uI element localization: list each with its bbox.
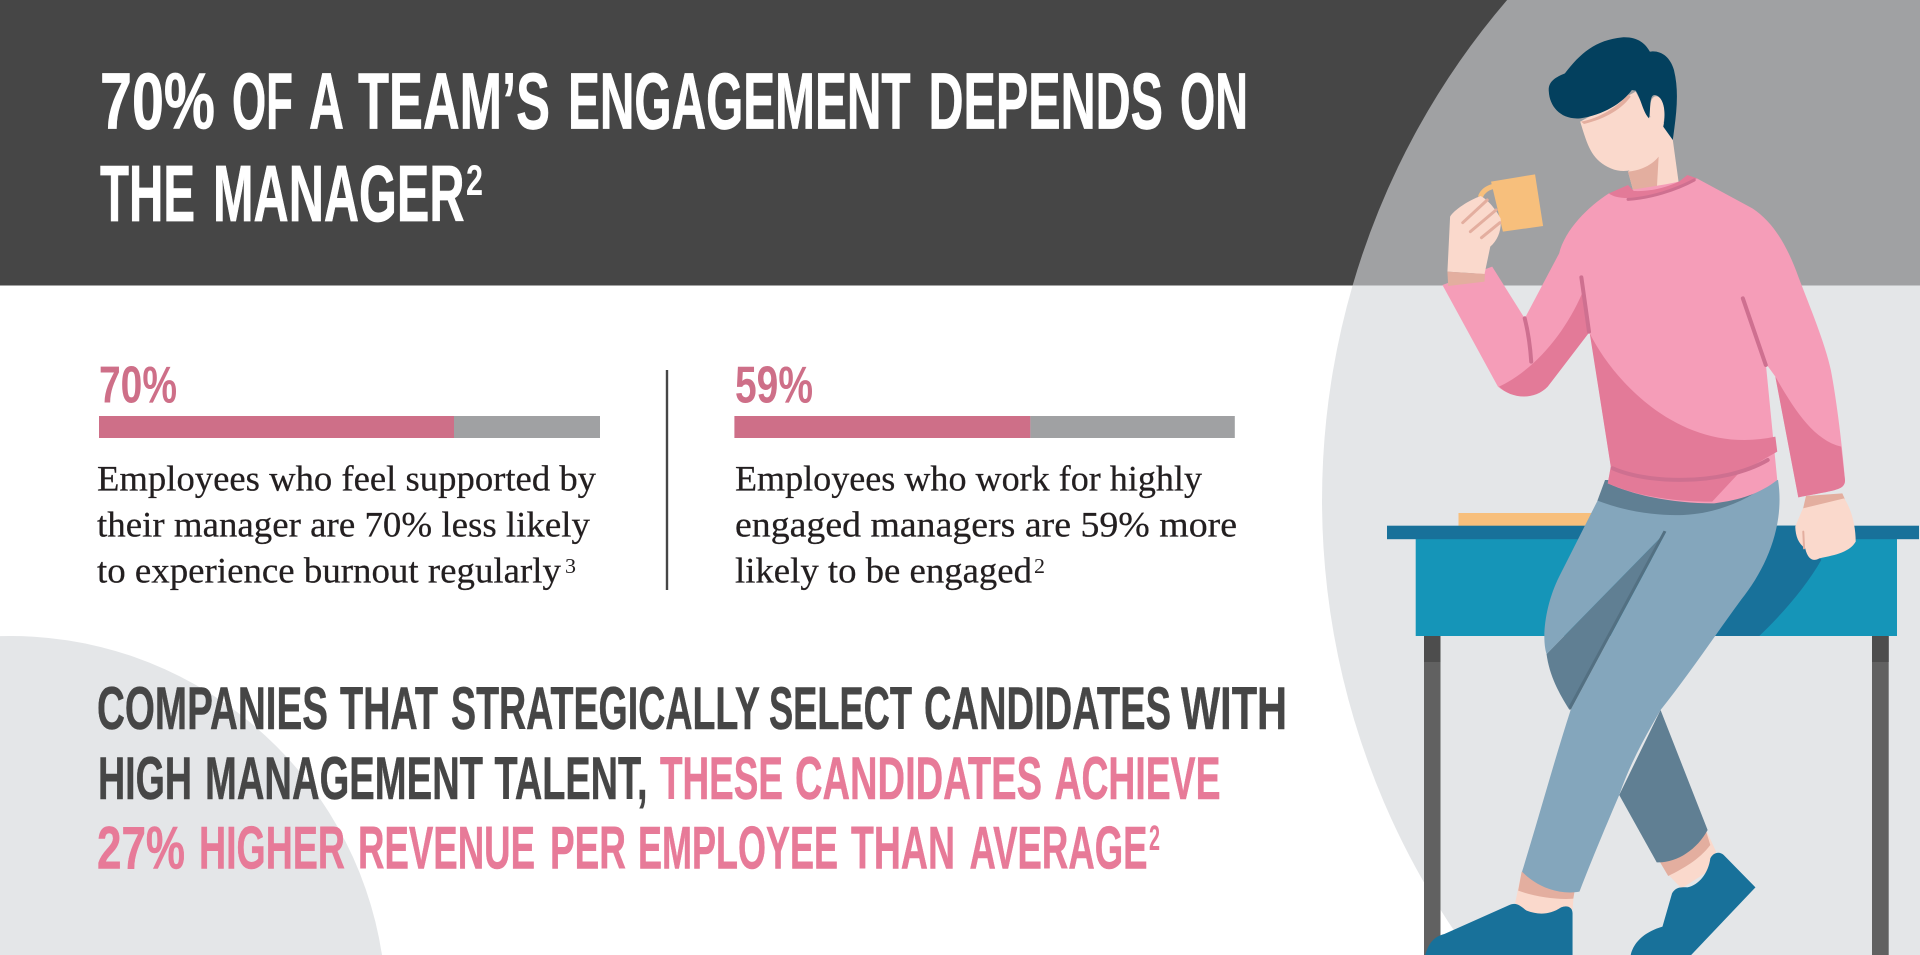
waistband: [1597, 480, 1773, 515]
callout text: THAN: [851, 814, 955, 882]
callout text: CANDIDATES: [924, 675, 1171, 742]
callout text: TALENT,: [494, 745, 648, 812]
stat value 70%: 70%: [99, 357, 177, 415]
sweater shading: body: [1590, 333, 1777, 502]
title: TEAM’S: [358, 56, 550, 146]
face: [1580, 92, 1673, 171]
description text: their manager are 70% less likely: [97, 505, 590, 545]
title: OF: [232, 56, 293, 146]
sweater shading: arm: [1499, 293, 1590, 397]
description text: Employees who work for highly: [735, 459, 1202, 499]
panel: 70% statistic: [97, 357, 600, 591]
callout text: SELECT: [769, 675, 912, 742]
finger lines: [1463, 200, 1500, 238]
description text: 2: [1034, 554, 1045, 578]
sweater fold lines: [1525, 180, 1768, 480]
background circle: right, upper grey part: [1353, 0, 1920, 286]
panel: 59% statistic: [734, 357, 1237, 591]
illustration: desk: [1387, 513, 1919, 955]
hair shadow: [1581, 94, 1631, 124]
progress bar 70%: [99, 416, 600, 438]
title: 2: [466, 157, 483, 205]
callout text: MANAGEMENT: [205, 745, 483, 812]
sweater: [1442, 178, 1845, 503]
callout text: HIGH: [98, 745, 192, 812]
front ankle shadow: [1518, 872, 1576, 899]
knuckle line: [1802, 532, 1805, 548]
back foot skin: [1657, 827, 1716, 888]
callout text: THESE: [660, 745, 783, 812]
collar: [1609, 175, 1697, 198]
callout text: STRATEGICALLY: [451, 675, 760, 742]
front shoe: [1425, 904, 1573, 955]
callout text: CANDIDATES: [795, 745, 1042, 812]
callout text: WITH: [1181, 675, 1287, 742]
callout text: COMPANIES: [97, 675, 328, 742]
description text: 3: [565, 554, 576, 578]
callout text: AVERAGE: [970, 814, 1148, 882]
title: A: [309, 56, 344, 146]
back ankle shadow: [1657, 827, 1710, 876]
callout text: EMPLOYEE: [638, 814, 838, 882]
lower body: [1425, 480, 1821, 955]
raised wrist shadow: [1447, 272, 1485, 286]
neck: [1628, 140, 1679, 193]
stat value 59%: 59%: [735, 357, 813, 415]
callout text: ACHIEVE: [1054, 745, 1220, 812]
callout text: 27%: [97, 814, 185, 882]
upper body: [1442, 37, 1845, 503]
background circle: bottom left: [0, 636, 382, 955]
callout text: REVENUE: [358, 814, 535, 882]
title: [100, 56, 1248, 238]
background circle: right, lower light part: [1322, 286, 1920, 955]
ear: [1650, 96, 1664, 128]
header band: [0, 0, 1920, 286]
callout text: HIGHER: [199, 814, 345, 882]
neck shadow: [1628, 157, 1659, 193]
back leg: [1619, 710, 1708, 862]
title: 70%: [100, 56, 215, 146]
desk top: [1387, 526, 1919, 539]
callout text: PER: [550, 814, 626, 882]
sweater shading: right arm: [1775, 377, 1845, 497]
title: ENGAGEMENT: [568, 56, 911, 146]
trouser crease: [1569, 531, 1666, 710]
divider: [666, 370, 668, 590]
paper on desk: [1458, 513, 1594, 527]
description text: Employees who feel supported by: [97, 459, 596, 499]
mug: [1481, 174, 1543, 232]
raised hand: [1447, 196, 1501, 274]
illustration: person: [1425, 37, 1856, 955]
resting wrist shadow: [1803, 493, 1845, 509]
description text: likely to be engaged: [735, 551, 1032, 591]
title: THE: [100, 149, 195, 238]
callout text: [97, 675, 1287, 882]
resting hand: [1795, 493, 1856, 560]
description text: [735, 459, 1237, 591]
description text: to experience burnout regularly: [97, 551, 561, 591]
title: DEPENDS: [928, 56, 1163, 146]
seat shadow on desk: [1714, 526, 1821, 636]
description text: engaged managers are 59% more: [735, 505, 1237, 545]
callout text: 2: [1149, 819, 1160, 858]
description text: [97, 459, 596, 591]
progress bar 59%: [734, 416, 1235, 438]
desk body: [1416, 539, 1897, 636]
trousers: [1522, 480, 1780, 892]
hair: [1549, 37, 1677, 140]
title: MANAGER: [213, 149, 464, 238]
title: ON: [1180, 56, 1248, 146]
callout text: THAT: [340, 675, 438, 742]
front foot skin: [1515, 875, 1574, 917]
fist: [1795, 498, 1856, 560]
back shoe: [1631, 853, 1755, 955]
desk legs: [1424, 636, 1889, 955]
back thigh: [1547, 532, 1666, 710]
